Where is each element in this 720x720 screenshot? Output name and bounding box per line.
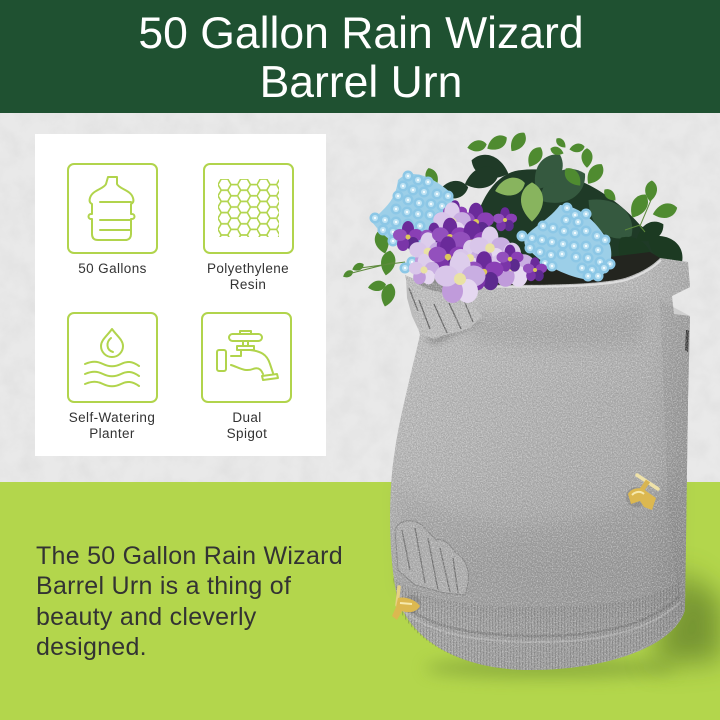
lower spigot <box>392 587 421 620</box>
title: Barrel Urn <box>260 58 462 107</box>
background: green floor <box>0 482 720 720</box>
blue flower cluster, right <box>516 202 616 282</box>
ribbed foot band <box>393 578 682 670</box>
description text: Barrel Urn is a thing of <box>36 572 291 600</box>
icon: water drop and waves <box>85 329 139 386</box>
rim highlight <box>470 260 661 287</box>
feature: 50 gallons <box>68 164 157 276</box>
shoulder shadow <box>470 300 650 348</box>
blue flower cluster, left <box>370 170 454 276</box>
description text: designed. <box>36 633 147 661</box>
label: Polyethylene <box>207 261 289 276</box>
description text: beauty and cleverly <box>36 603 257 631</box>
label: Self-Watering <box>69 410 155 425</box>
label: Dual <box>232 410 262 425</box>
panel: product features <box>35 134 326 456</box>
lower shading <box>395 470 682 618</box>
top scallop shell <box>406 272 484 345</box>
background: textured grey wall <box>0 113 720 483</box>
right side panel <box>660 300 690 612</box>
title: 50 Gallon Rain Wizard <box>138 9 584 58</box>
label: Spigot <box>227 426 267 441</box>
icon: hexagon mesh <box>218 179 279 237</box>
foliage behind flowers <box>342 129 689 308</box>
granite light flecks <box>390 258 690 670</box>
upper spigot <box>626 475 658 510</box>
icon: faucet <box>217 331 278 380</box>
barrel body <box>390 252 690 675</box>
label: Resin <box>230 277 266 292</box>
bright leaves <box>342 129 679 308</box>
feature: self-watering planter <box>68 313 157 441</box>
feature: dual spigot <box>202 313 291 441</box>
floor shadow <box>425 570 720 678</box>
purple petunias <box>393 200 547 303</box>
lower scallop shell <box>395 521 468 595</box>
label: 50 Gallons <box>78 261 147 276</box>
header band <box>0 0 720 113</box>
description text: The 50 Gallon Rain Wizard <box>36 542 343 570</box>
stems <box>348 200 651 274</box>
product: rain barrel urn with flowers <box>342 129 720 678</box>
feature: polyethylene resin <box>204 164 293 292</box>
planter opening <box>462 252 660 285</box>
icon: water jug <box>88 177 134 240</box>
granite speckle <box>390 258 690 670</box>
dark leaves <box>436 150 684 275</box>
label: Planter <box>89 426 135 441</box>
